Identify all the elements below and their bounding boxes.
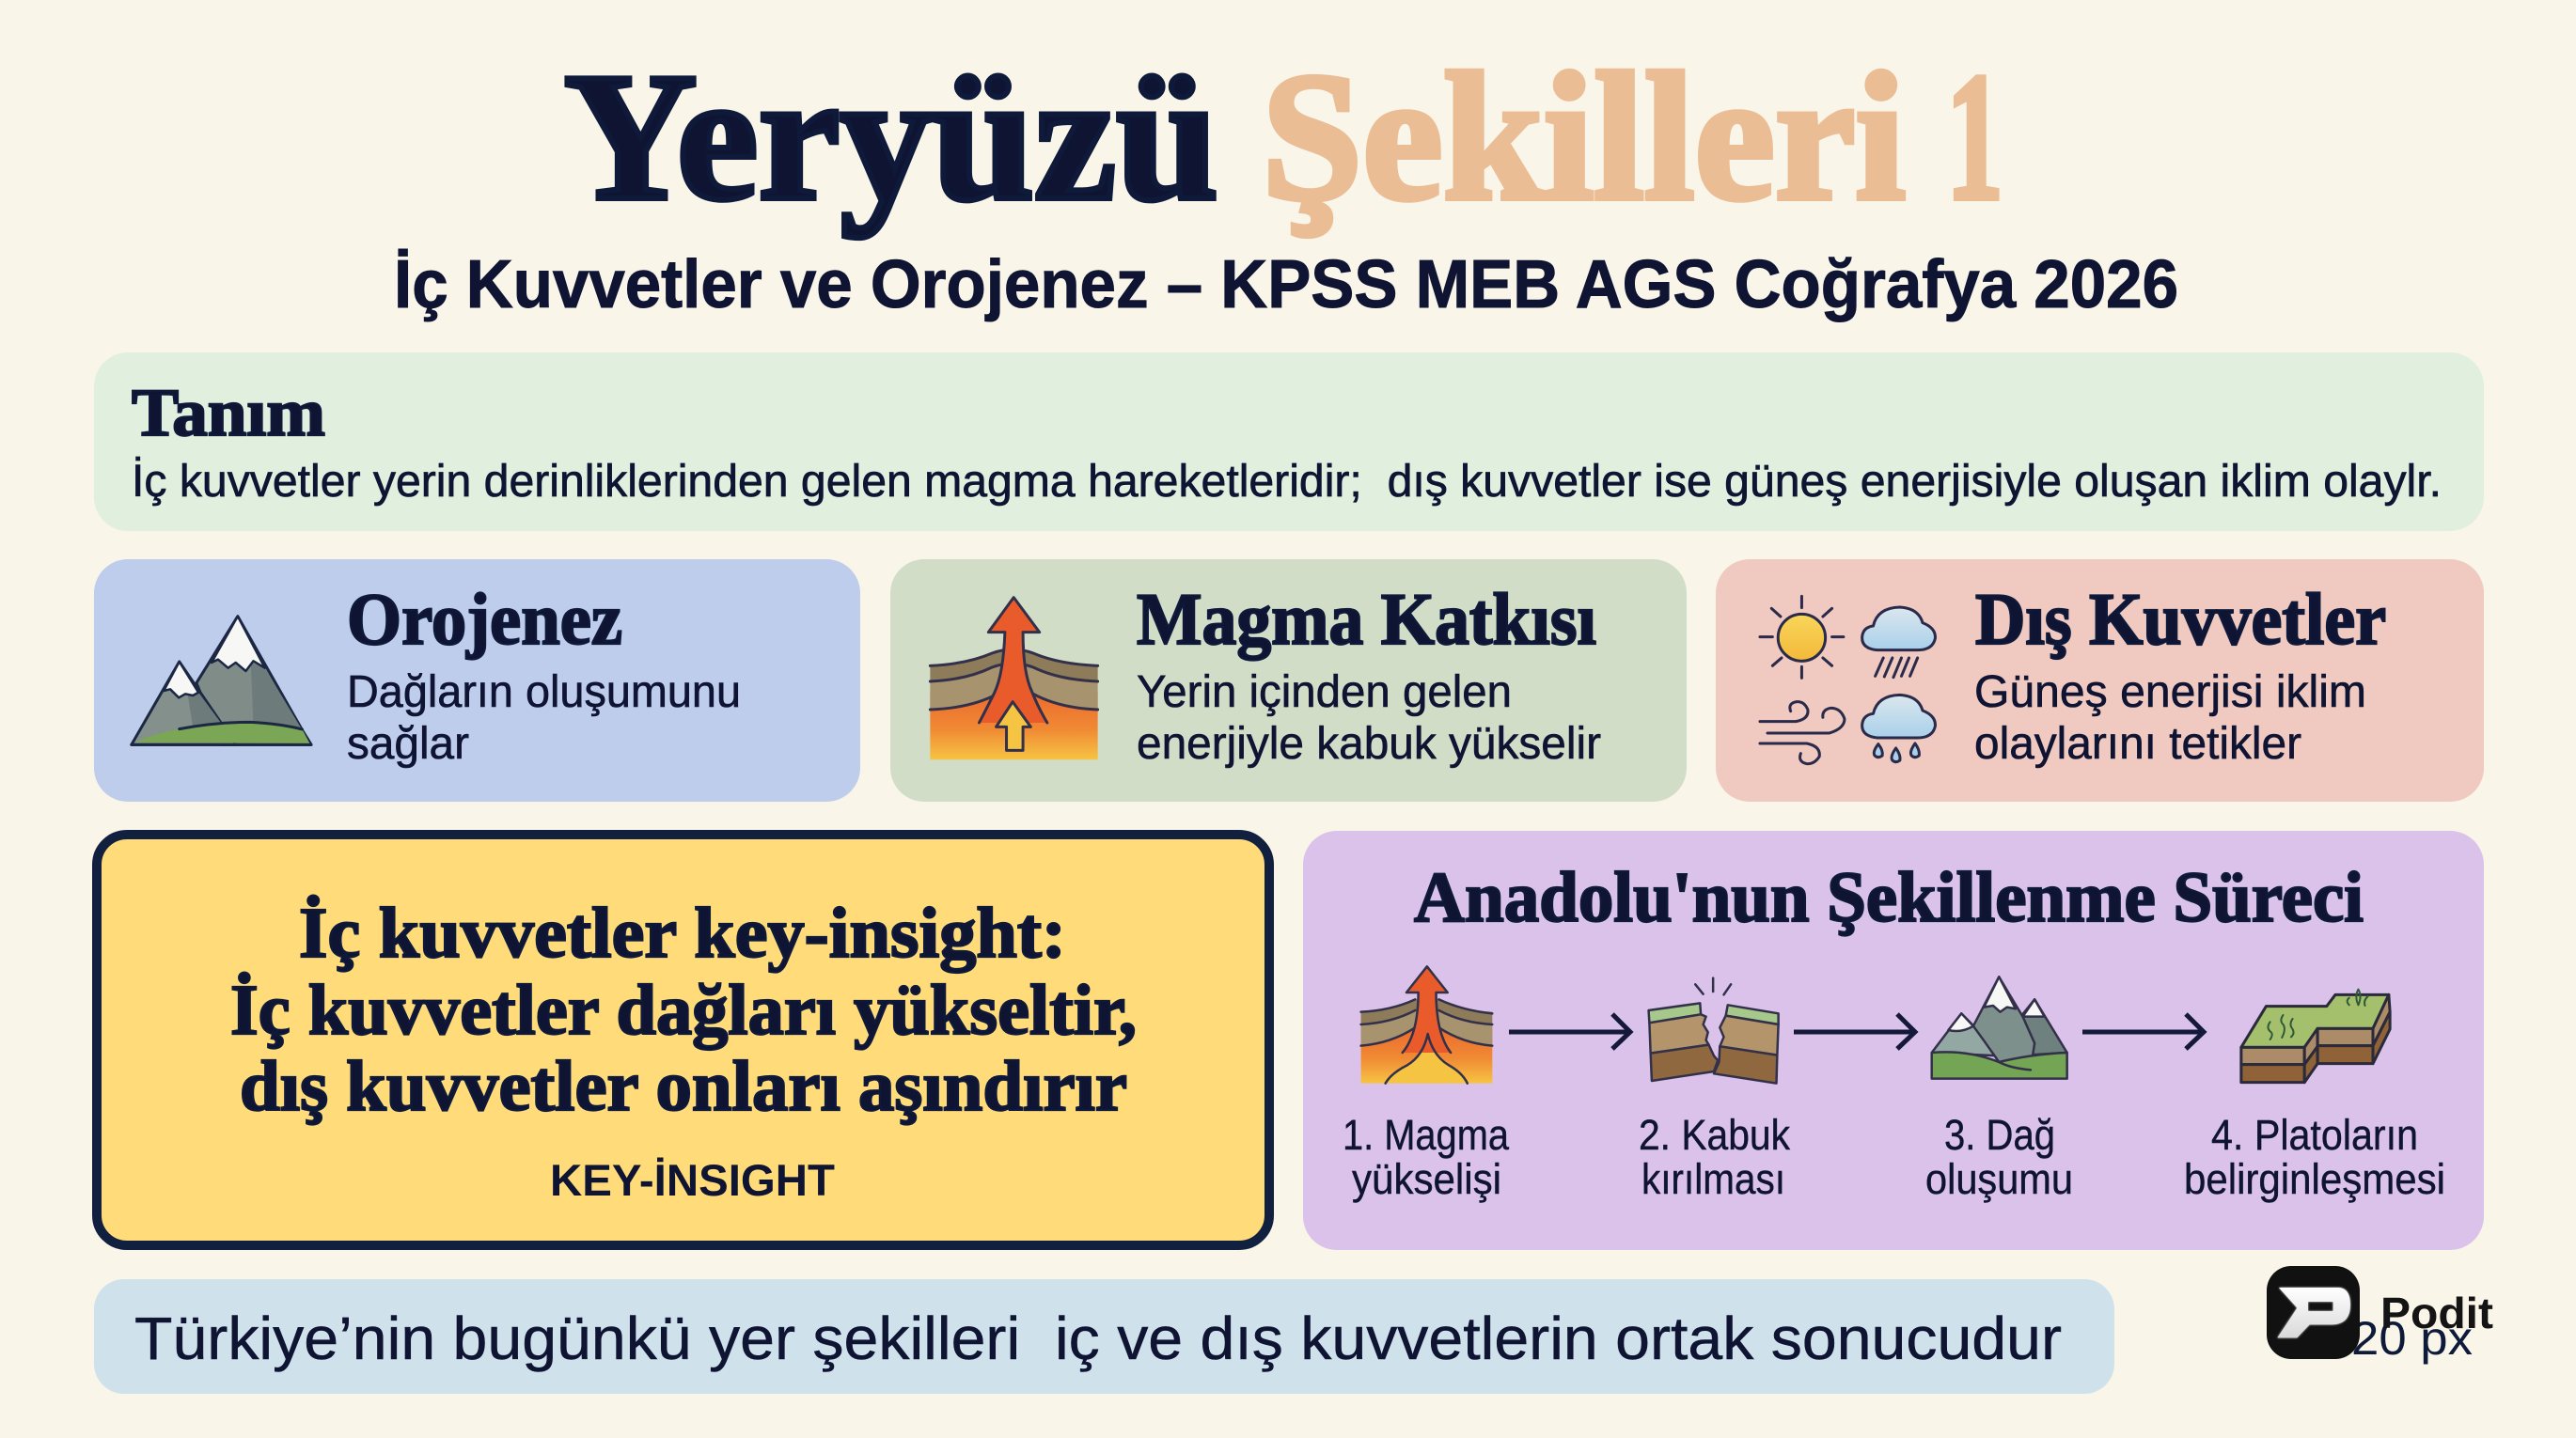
arrow 1 xyxy=(1509,1014,1630,1049)
panel: magma katkısı xyxy=(890,559,1687,802)
icon: crust fracture xyxy=(1649,978,1779,1084)
label: step 3: oluşumu xyxy=(1925,1155,2073,1203)
title: Yeryüzü xyxy=(564,36,1218,239)
key insight statement: dış kuvvetler onları aşındırır xyxy=(240,1047,1127,1126)
step 2: kabuk kırılması xyxy=(1639,978,1790,1203)
heading: orojenez: Orojenez xyxy=(347,578,622,660)
arrow 2 xyxy=(1794,1014,1915,1049)
icon: weather set xyxy=(1760,596,1935,764)
label: step 4: belirginleşmesi xyxy=(2184,1155,2445,1203)
arrow 3 xyxy=(2082,1014,2204,1049)
icon: mountain range xyxy=(1932,977,2067,1079)
key insight statement: İç kuvvetler dağları yükseltir, xyxy=(230,971,1137,1050)
logo: podit xyxy=(2267,1266,2493,1359)
label: step 3: 3. Dağ xyxy=(1944,1111,2055,1159)
step 3: dağ oluşumu xyxy=(1925,977,2073,1203)
description: magma katkısı: enerjiyle kabuk yükselir xyxy=(1137,719,1601,769)
label: step 4 xyxy=(2184,1111,2445,1203)
heading: süreç: Anadolu'nun Şekillenme Süreci xyxy=(1414,858,2364,937)
stray size text: 20 px xyxy=(2351,1312,2473,1365)
label: step 3 xyxy=(1925,1111,2073,1203)
icon: mountains xyxy=(132,617,311,744)
panel: dış kuvvetler xyxy=(1716,559,2484,802)
heading: dış kuvvetler: Dış Kuvvetler xyxy=(1975,578,2386,660)
icon: magma xyxy=(1361,966,1492,1084)
panel: conclusion bar xyxy=(94,1279,2114,1394)
step 4: platoların belirginleşmesi xyxy=(2184,990,2445,1203)
panel: tanım xyxy=(94,352,2484,531)
step 1: magma yükselişi xyxy=(1343,966,1510,1203)
conclusion text: Türkiye’nin bugünkü yer şekilleri iç ve dış kuvvetlerin ortak sonucudur xyxy=(134,1305,2062,1372)
title: Şekilleri xyxy=(1262,36,1906,239)
label: step 2 xyxy=(1639,1111,1790,1203)
key insight statement xyxy=(230,894,1137,1126)
panel: key insight xyxy=(97,835,1269,1245)
description: orojenez: Dağların oluşumunu xyxy=(347,667,741,717)
subtitle: İç Kuvvetler ve Orojenez – KPSS MEB AGS Coğrafya 2026 xyxy=(394,247,2178,322)
panel: orojenez xyxy=(94,559,860,802)
label: step 1: 1. Magma xyxy=(1343,1111,1510,1159)
title xyxy=(564,36,2003,239)
icon: magma rising xyxy=(930,598,1098,759)
description: dış kuvvetler xyxy=(1974,667,2366,769)
label: step 4: 4. Platoların xyxy=(2211,1111,2418,1159)
definition text: İç kuvvetler yerin derinliklerinden gelen magma hareketleridir; dış kuvvetler ise güneş enerjisiyle oluşan iklim olaylr. xyxy=(132,457,2442,507)
key insight statement: İç kuvvetler key-insight: xyxy=(299,894,1066,973)
icon: plateau block xyxy=(2241,990,2390,1083)
icon: podit mark xyxy=(2267,1266,2360,1359)
heading: magma katkısı: Magma Katkısı xyxy=(1137,578,1596,660)
label: step 1 xyxy=(1343,1111,1510,1203)
title: 1 xyxy=(1946,36,2003,239)
label: step 2: 2. Kabuk xyxy=(1639,1111,1790,1159)
heading: tanım: Tanım xyxy=(132,375,325,450)
description: dış kuvvetler: Güneş enerjisi iklim xyxy=(1974,667,2366,717)
description: orojenez xyxy=(347,667,741,769)
description: magma katkısı: Yerin içinden gelen xyxy=(1137,667,1512,717)
wordmark: Podit xyxy=(2380,1289,2493,1337)
panel: anadolu süreci xyxy=(1303,831,2484,1250)
label: step 2: kırılması xyxy=(1641,1155,1785,1203)
description: orojenez: sağlar xyxy=(347,719,469,769)
description: magma katkısı xyxy=(1137,667,1601,769)
key insight label: KEY-İNSIGHT xyxy=(550,1155,835,1205)
description: dış kuvvetler: olaylarını tetikler xyxy=(1974,719,2301,769)
label: step 1: yükselişi xyxy=(1352,1155,1501,1203)
